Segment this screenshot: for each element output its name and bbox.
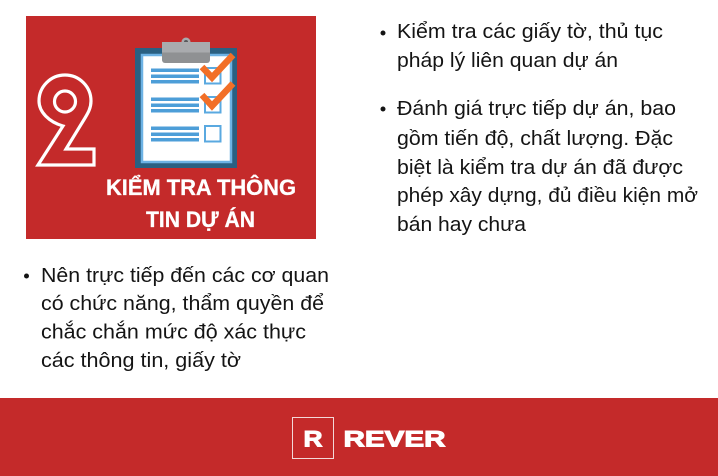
icon: clipboard checklist bbox=[135, 38, 237, 168]
logo: Rever: R bbox=[304, 426, 323, 452]
text block: left bullet: Nên trực tiếp đến các cơ quan bbox=[41, 264, 329, 287]
text block: left bullet: chắc chắn mức độ xác thực bbox=[41, 320, 306, 344]
panel: step 2 header bbox=[26, 16, 316, 239]
text block: left bullet: có chức năng, thẩm quyền để bbox=[41, 292, 324, 315]
text block: right bullet 2: gồm tiến độ, chất lượng. Đặc bbox=[397, 127, 673, 150]
text block: right bullet 2: biệt là kiểm tra dự án đã được bbox=[397, 156, 683, 179]
heading: step title: KIỂM TRA THÔNG bbox=[106, 175, 296, 200]
logo: Rever bbox=[292, 418, 446, 458]
footer band bbox=[0, 398, 718, 476]
text block: right bullet 2 bbox=[380, 97, 698, 236]
text block: right bullet 1: pháp lý liên quan dự án bbox=[397, 49, 618, 72]
heading: step title: TIN DỰ ÁN bbox=[146, 207, 255, 232]
text block: left bullet: các thông tin, giấy tờ bbox=[41, 349, 241, 372]
text block: left bullet bbox=[24, 264, 329, 372]
text block: right bullet 2: Đánh giá trực tiếp dự án, bao bbox=[397, 97, 676, 120]
text block: right bullet 2: bán hay chưa bbox=[397, 213, 527, 236]
text block: right bullet 1 bbox=[380, 20, 663, 72]
icon: outlined number 2 bbox=[38, 75, 94, 165]
text block: right bullet 1: Kiểm tra các giấy tờ, thủ tục bbox=[397, 20, 663, 43]
heading: step title bbox=[106, 175, 296, 232]
text block: right bullet 2: phép xây dựng, đủ điều kiện mở bbox=[397, 184, 698, 207]
logo: Rever: REVER bbox=[344, 426, 446, 452]
